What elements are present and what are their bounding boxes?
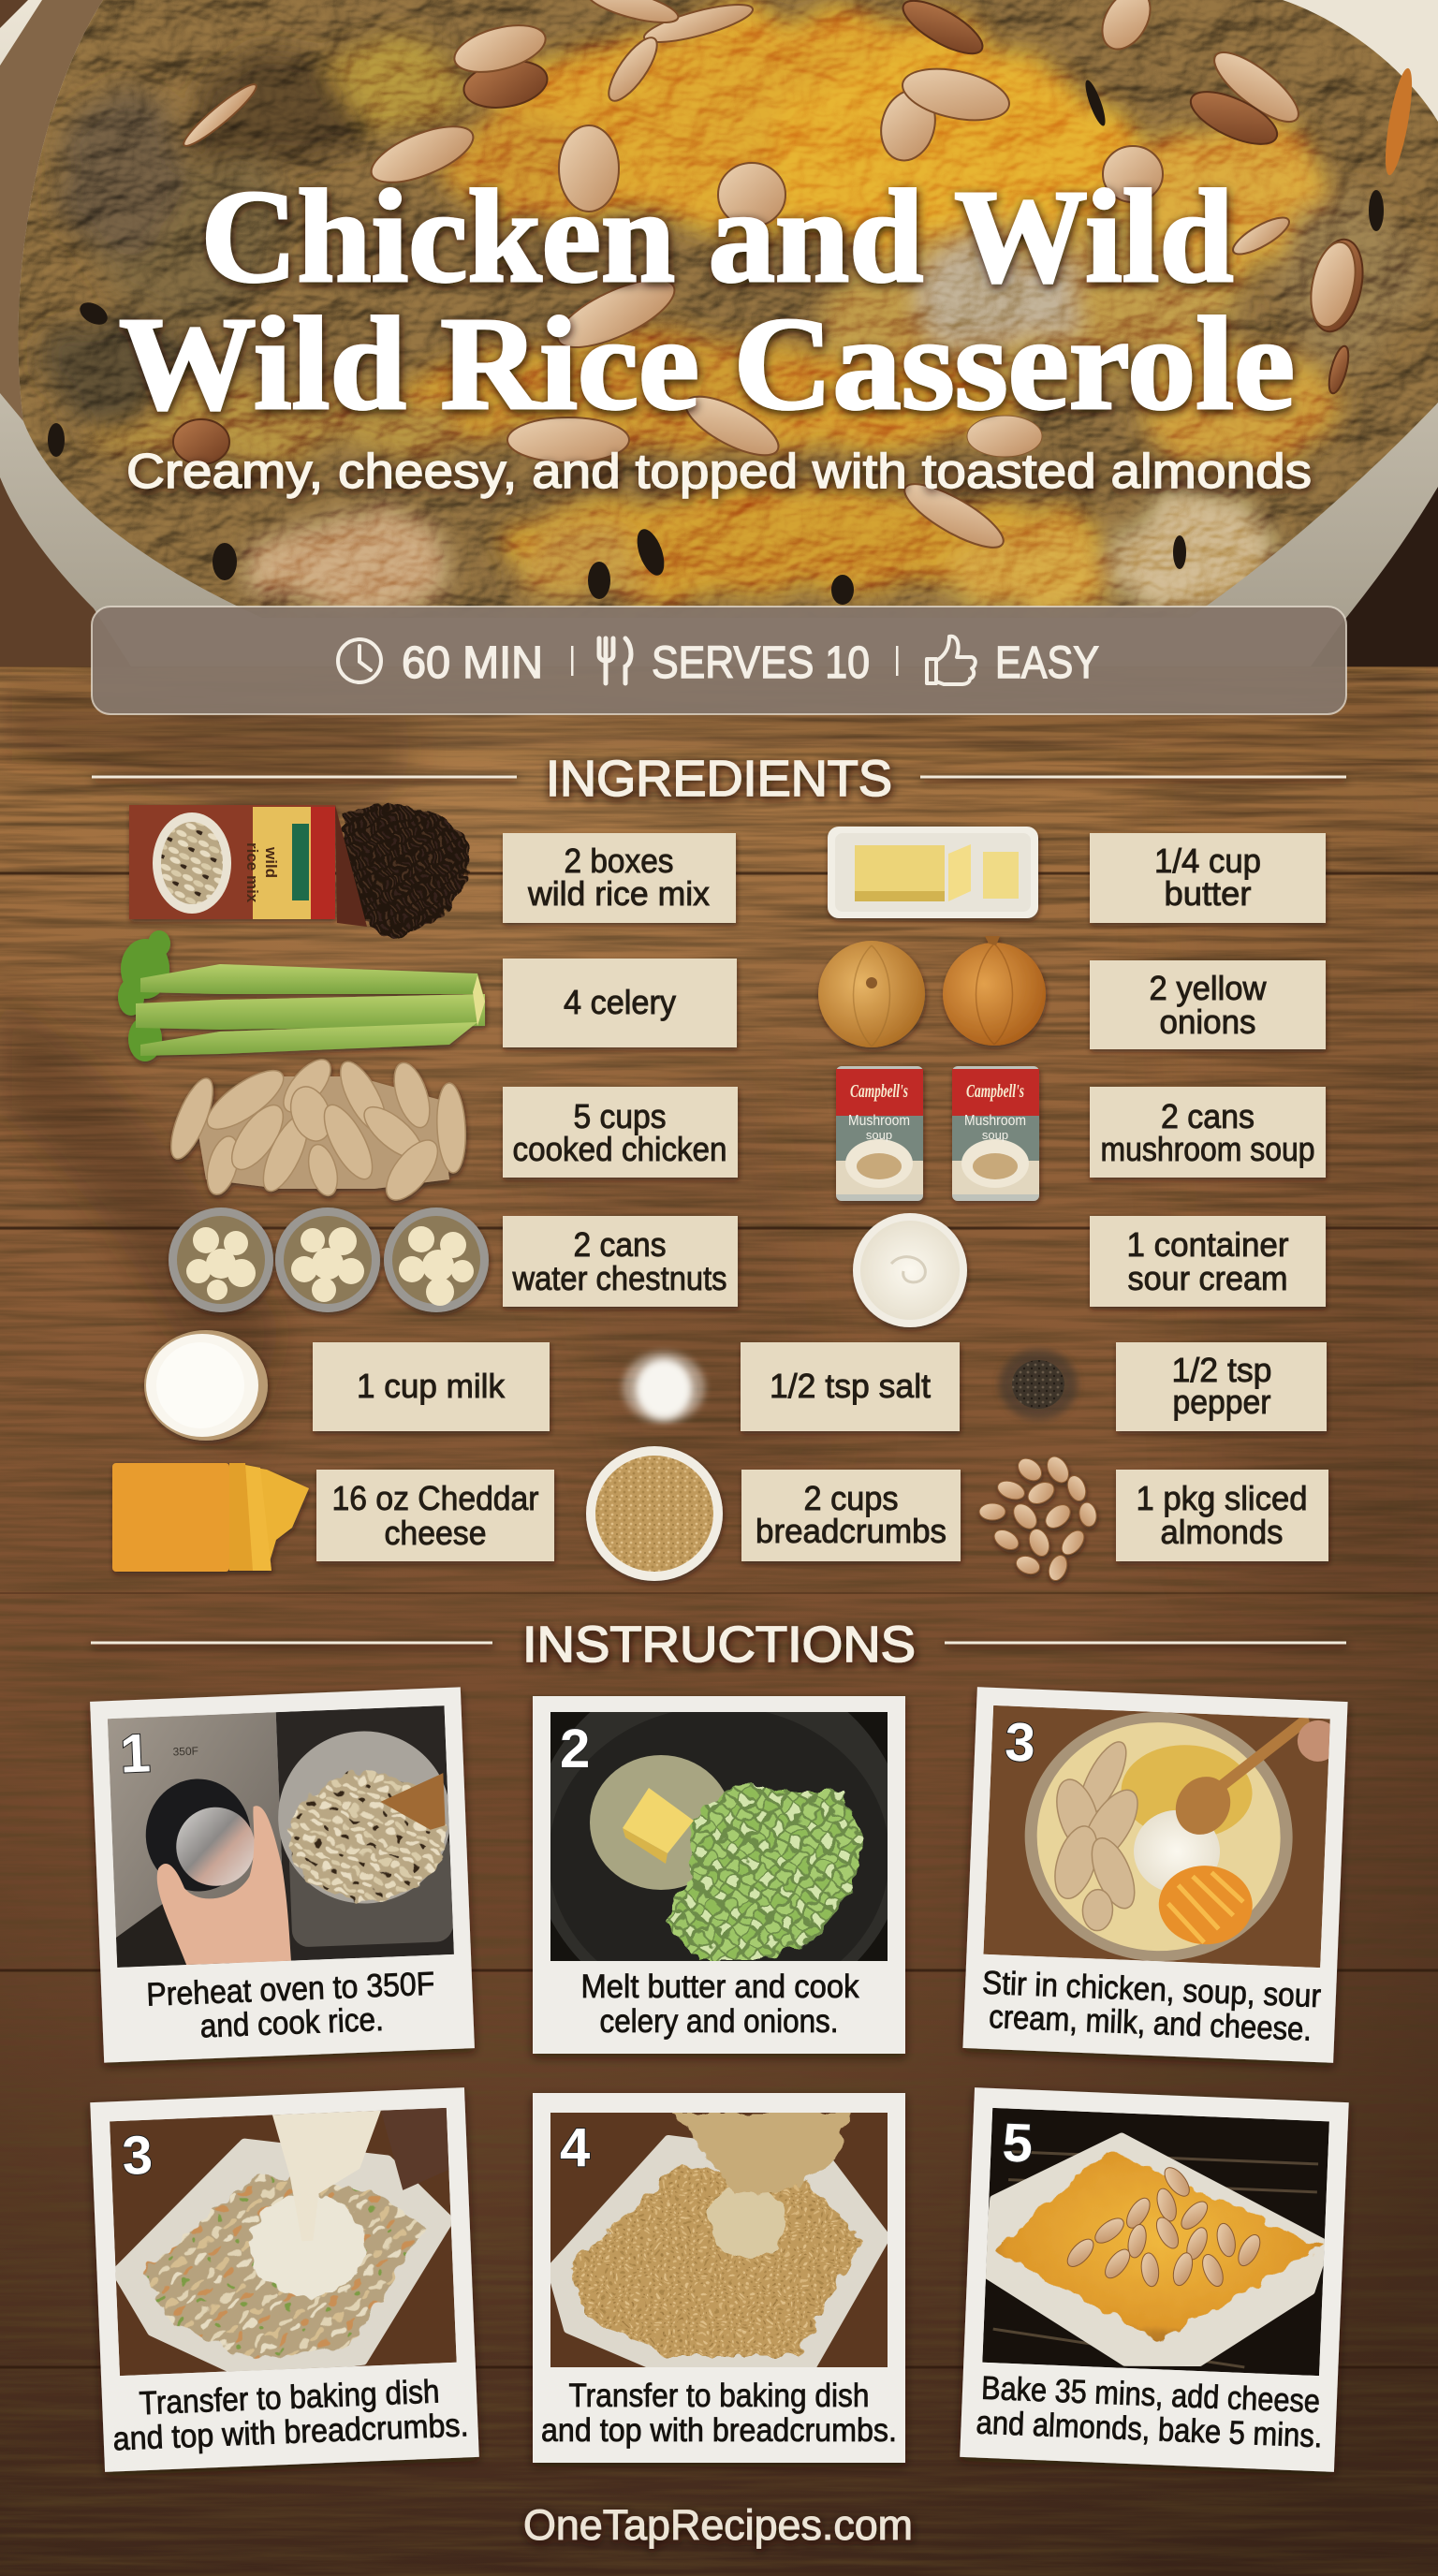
can 1: soup bbox=[866, 1128, 892, 1142]
step card 3: stir in chicken, soup, sour cream bbox=[962, 1687, 1348, 2063]
ingredients heading: INGREDIENTS bbox=[546, 751, 892, 807]
photo: breadcrumbs on dish bbox=[550, 2113, 888, 2368]
ingredient illustration: pepper pile bbox=[999, 1349, 1078, 1420]
title: Wild Rice Casserole bbox=[119, 289, 1295, 437]
ingredient label: celery bbox=[503, 959, 737, 1047]
ingredient illustration: cans of mushroom soup bbox=[836, 1066, 1039, 1201]
step number: 5 bbox=[1001, 2112, 1034, 2174]
ingredient illustration: celery bbox=[118, 930, 485, 1061]
stat: servings: SERVES 10 bbox=[652, 638, 870, 688]
caption: cream, milk, and cheese. bbox=[988, 1998, 1313, 2048]
ingredient illustration: salt pile bbox=[623, 1352, 705, 1423]
step card 6: bake with cheese and almonds bbox=[960, 2087, 1349, 2472]
ingredient illustration: shredded chicken bbox=[163, 1052, 467, 1208]
step number: 3 bbox=[1004, 1711, 1036, 1774]
photo: butter and celery in a pan bbox=[550, 1712, 888, 1961]
ingredient label: cooked chicken bbox=[503, 1087, 738, 1178]
step number: 3 bbox=[121, 2125, 154, 2187]
ingredient label: almonds bbox=[1116, 1470, 1328, 1561]
caption: and almonds, bake 5 mins. bbox=[976, 2405, 1323, 2454]
ingredient label: sour cream: 1 container bbox=[1127, 1225, 1289, 1264]
ingredient label: butter bbox=[1090, 833, 1326, 923]
caption bbox=[980, 1965, 1322, 2048]
caption: Stir in chicken, soup, sour bbox=[981, 1965, 1322, 2014]
ingredient illustration: glass of milk bbox=[144, 1330, 268, 1441]
ingredient label: butter: butter bbox=[1165, 874, 1252, 913]
ingredient label: celery: 4 celery bbox=[564, 983, 676, 1021]
step number: 4 bbox=[560, 2117, 590, 2178]
ingredient label: cheddar: 16 oz Cheddar bbox=[331, 1479, 539, 1517]
photo: oven knob and pot of rice bbox=[108, 1705, 456, 1970]
can 1 bbox=[836, 1066, 923, 1201]
caption: Transfer to baking dish bbox=[569, 2378, 869, 2414]
can 2 bbox=[952, 1066, 1039, 1201]
ingredient label: cooked chicken: cooked chicken bbox=[513, 1130, 726, 1168]
ingredient label: wild rice mix: wild rice mix bbox=[527, 874, 710, 913]
ingredient label: mushroom soup: mushroom soup bbox=[1101, 1130, 1314, 1168]
footer website credit: OneTapRecipes.com bbox=[523, 2501, 913, 2549]
title bbox=[119, 162, 1295, 437]
ingredient label: cooked chicken: 5 cups bbox=[573, 1097, 667, 1135]
ingredient illustration: cheddar cheese bbox=[112, 1463, 309, 1572]
ingredient label: salt bbox=[741, 1342, 960, 1431]
stat: difficulty: EASY bbox=[995, 638, 1099, 688]
photo: casserole in oven bbox=[982, 2108, 1331, 2376]
caption bbox=[541, 2378, 897, 2449]
ingredient label: yellow onions: onions bbox=[1159, 1003, 1256, 1041]
ingredient label: water chestnuts: 2 cans bbox=[573, 1225, 667, 1264]
ingredient illustration: sour cream bowl bbox=[853, 1213, 967, 1327]
recipe stats bar bbox=[92, 607, 1346, 714]
ingredient label: wild rice mix: 2 boxes bbox=[564, 842, 674, 880]
caption bbox=[580, 1969, 859, 2040]
can 1: Campbell's bbox=[850, 1081, 908, 1102]
caption: Transfer to baking dish bbox=[139, 2373, 440, 2422]
caption: Bake 35 mins, add cheese bbox=[980, 2370, 1321, 2420]
ingredient illustration: yellow onions bbox=[818, 936, 1046, 1047]
ingredient label: milk bbox=[313, 1342, 550, 1431]
ingredient label: almonds: 1 pkg sliced bbox=[1137, 1479, 1307, 1517]
ingredient label: sour cream bbox=[1090, 1216, 1326, 1307]
step card 5: top with breadcrumbs bbox=[533, 2093, 905, 2463]
title: Chicken and Wild bbox=[200, 162, 1234, 310]
can 2: soup bbox=[982, 1128, 1008, 1142]
step card 1: preheat oven and cook rice bbox=[90, 1687, 475, 2063]
ingredient label: breadcrumbs: breadcrumbs bbox=[756, 1512, 946, 1550]
ingredient label: water chestnuts: water chestnuts bbox=[512, 1259, 726, 1297]
step number: 1 bbox=[119, 1722, 152, 1785]
ingredient label: milk: 1 cup milk bbox=[357, 1367, 506, 1405]
caption: celery and onions. bbox=[599, 2003, 839, 2040]
ingredient label: wild rice mix bbox=[503, 833, 736, 923]
hero photo: casserole in white dish bbox=[0, 0, 1438, 666]
ingredient label: pepper bbox=[1116, 1342, 1327, 1431]
subtitle: Creamy, cheesy, and topped with toasted almonds bbox=[126, 445, 1312, 499]
ingredient label: mushroom soup: 2 cans bbox=[1161, 1097, 1255, 1135]
can 2: Mushroom bbox=[964, 1113, 1026, 1129]
ingredient label: pepper: 1/2 tsp bbox=[1172, 1351, 1271, 1389]
ingredient label: yellow onions: 2 yellow bbox=[1150, 969, 1267, 1007]
caption: Melt butter and cook bbox=[580, 1969, 859, 2005]
ingredient label: cheddar bbox=[316, 1470, 554, 1561]
stat: time: 60 MIN bbox=[402, 638, 543, 688]
caption bbox=[146, 1966, 436, 2047]
step card 2: melt butter and cook vegetables bbox=[532, 1663, 906, 2054]
caption: and top with breadcrumbs. bbox=[112, 2407, 469, 2457]
ingredient label: mushroom soup bbox=[1090, 1087, 1326, 1178]
icon: fork and knife bbox=[599, 638, 631, 683]
photo: oven knob and pot of rice: 350F bbox=[172, 1744, 198, 1758]
caption: and cook rice. bbox=[199, 2001, 384, 2045]
ingredient illustration: breadcrumbs bowl bbox=[586, 1446, 723, 1581]
ingredient label: sour cream: sour cream bbox=[1127, 1259, 1288, 1297]
ingredient label: pepper: pepper bbox=[1172, 1383, 1271, 1421]
step number: 2 bbox=[560, 1719, 590, 1779]
photo: mixing bowl bbox=[983, 1705, 1340, 1969]
caption: and top with breadcrumbs. bbox=[541, 2412, 897, 2449]
can 2: Campbell's bbox=[966, 1081, 1024, 1102]
ingredient illustration: butter bbox=[828, 827, 1038, 918]
ingredient label: water chestnuts bbox=[503, 1216, 738, 1307]
sliced almonds on casserole bbox=[173, 0, 1417, 559]
ingredient illustration: sliced almonds bbox=[979, 1453, 1098, 1583]
can 1: Mushroom bbox=[848, 1113, 910, 1129]
ingredient label: yellow onions bbox=[1090, 960, 1326, 1049]
ingredient label: butter: 1/4 cup bbox=[1154, 842, 1261, 880]
ingredient illustration: water chestnut cans bbox=[169, 1208, 489, 1312]
instructions heading: INSTRUCTIONS bbox=[522, 1617, 916, 1673]
ingredient illustration: wild rice box: wild bbox=[262, 846, 280, 878]
ingredient label: salt: 1/2 tsp salt bbox=[770, 1367, 931, 1405]
ingredient label: almonds: almonds bbox=[1161, 1513, 1283, 1551]
icon: thumbs up bbox=[927, 637, 976, 684]
photo: pouring into baking dish bbox=[110, 2108, 457, 2380]
separator: servings and difficulty bbox=[896, 646, 899, 676]
ingredient label: breadcrumbs: 2 cups bbox=[803, 1479, 899, 1517]
ingredient illustration: wild rice box: rice mix bbox=[243, 842, 261, 903]
ingredient illustration: wild rice box bbox=[129, 805, 470, 939]
step card 4: pour into baking dish bbox=[90, 2087, 479, 2472]
icon: clock bbox=[338, 639, 381, 682]
separator: time and servings bbox=[571, 646, 573, 676]
caption bbox=[976, 2370, 1325, 2454]
caption bbox=[110, 2372, 469, 2457]
ingredient label: breadcrumbs bbox=[741, 1470, 961, 1561]
caption: Preheat oven to 350F bbox=[146, 1966, 435, 2013]
ingredient label: cheddar: cheese bbox=[384, 1514, 487, 1552]
